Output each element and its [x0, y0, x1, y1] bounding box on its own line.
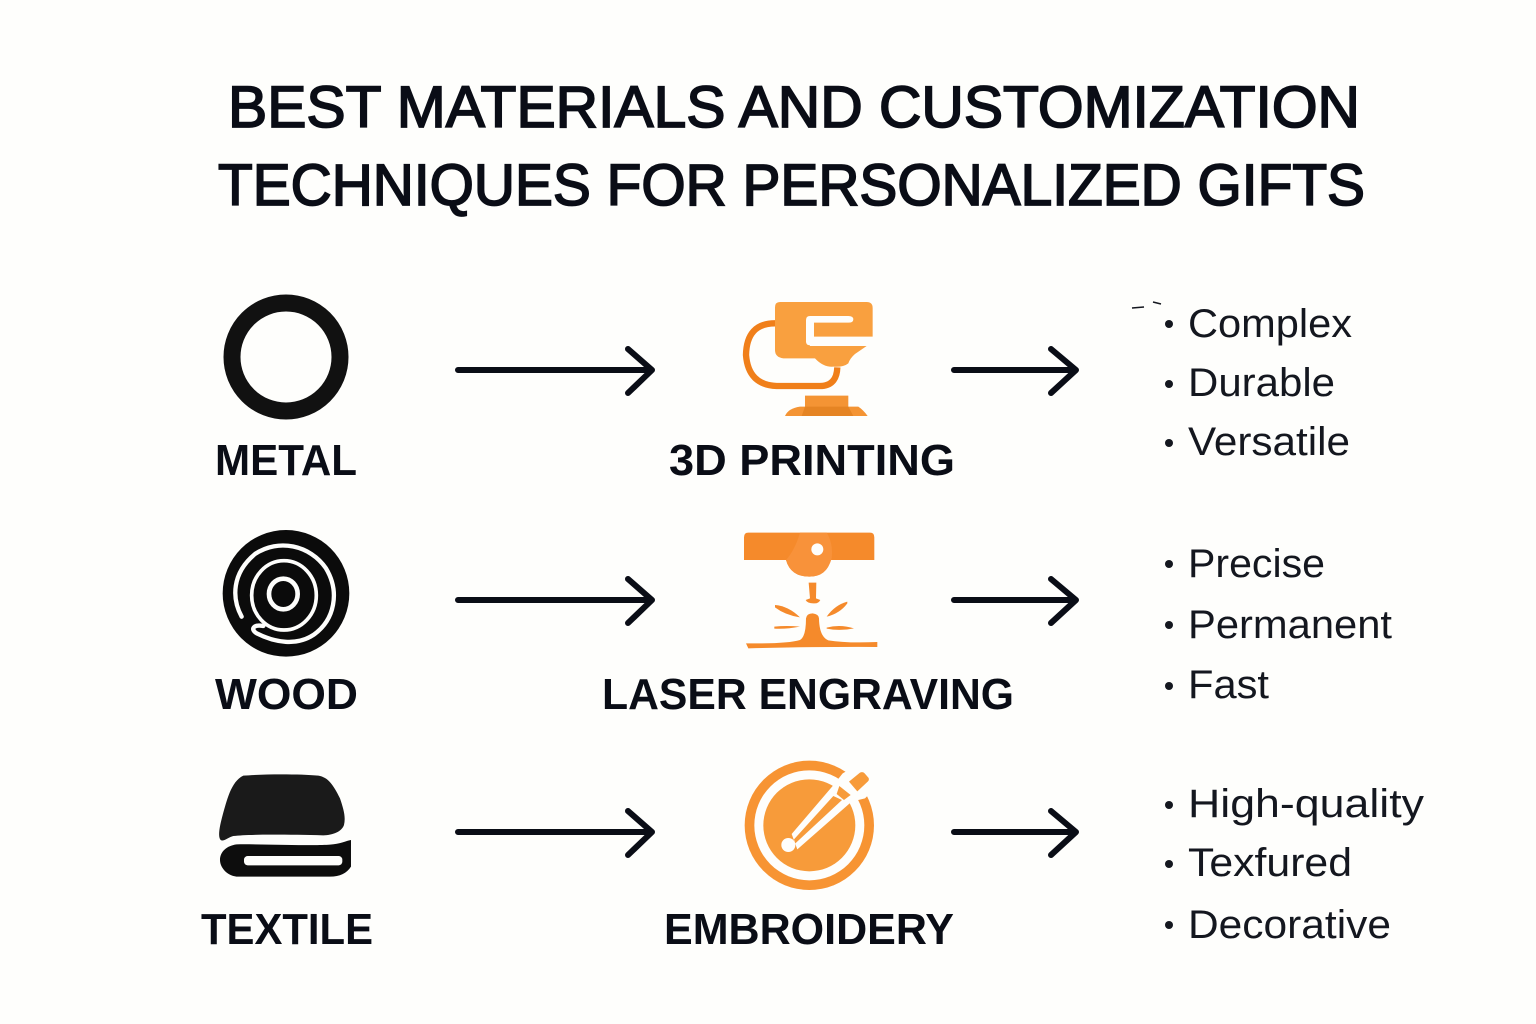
list: laser engraving qualities: Fast	[1188, 663, 1269, 707]
list: laser engraving qualities: Precise	[1188, 542, 1325, 586]
list: laser engraving qualities: Permanent	[1188, 603, 1392, 647]
list: embroidery qualities: Texfured	[1188, 841, 1352, 885]
list: 3D printing qualities: Complex	[1188, 302, 1352, 346]
title: BEST MATERIALS AND CUSTOMIZATION	[228, 75, 1360, 140]
arrow: laser engraving to qualities	[954, 579, 1076, 623]
list: 3D printing qualities: Versatile	[1188, 420, 1350, 464]
title	[218, 75, 1365, 218]
label: metal: METAL	[215, 436, 357, 485]
icon: wood rings	[223, 530, 349, 657]
label: 3D printing: 3D PRINTING	[669, 436, 955, 485]
arrow: embroidery to qualities	[954, 811, 1076, 855]
arrow: textile to embroidery	[458, 811, 652, 855]
list: laser engraving qualities	[1165, 542, 1392, 707]
icon: laser engraver	[744, 533, 877, 648]
list: embroidery qualities: Decorative	[1188, 903, 1391, 947]
list: embroidery qualities: High-quality	[1188, 782, 1424, 826]
list: 3D printing qualities: Durable	[1188, 361, 1335, 405]
icon: embroidery	[745, 761, 877, 890]
arrow: metal to 3D printing	[458, 349, 652, 393]
label: embroidery: EMBROIDERY	[664, 905, 954, 954]
title: TECHNIQUES FOR PERSONALIZED GIFTS	[218, 153, 1365, 218]
icon: metal ring	[232, 303, 340, 411]
list: embroidery qualities	[1165, 782, 1424, 947]
label: wood: WOOD	[215, 670, 358, 719]
list: 3D printing qualities	[1132, 302, 1352, 464]
arrow: 3D printing to qualities	[954, 349, 1076, 393]
icon: textile	[219, 774, 351, 877]
icon: 3D printer	[746, 302, 873, 416]
arrow: wood to laser engraving	[458, 579, 652, 623]
label: laser engraving: LASER ENGRAVING	[602, 670, 1014, 719]
label: textile: TEXTILE	[201, 905, 373, 954]
